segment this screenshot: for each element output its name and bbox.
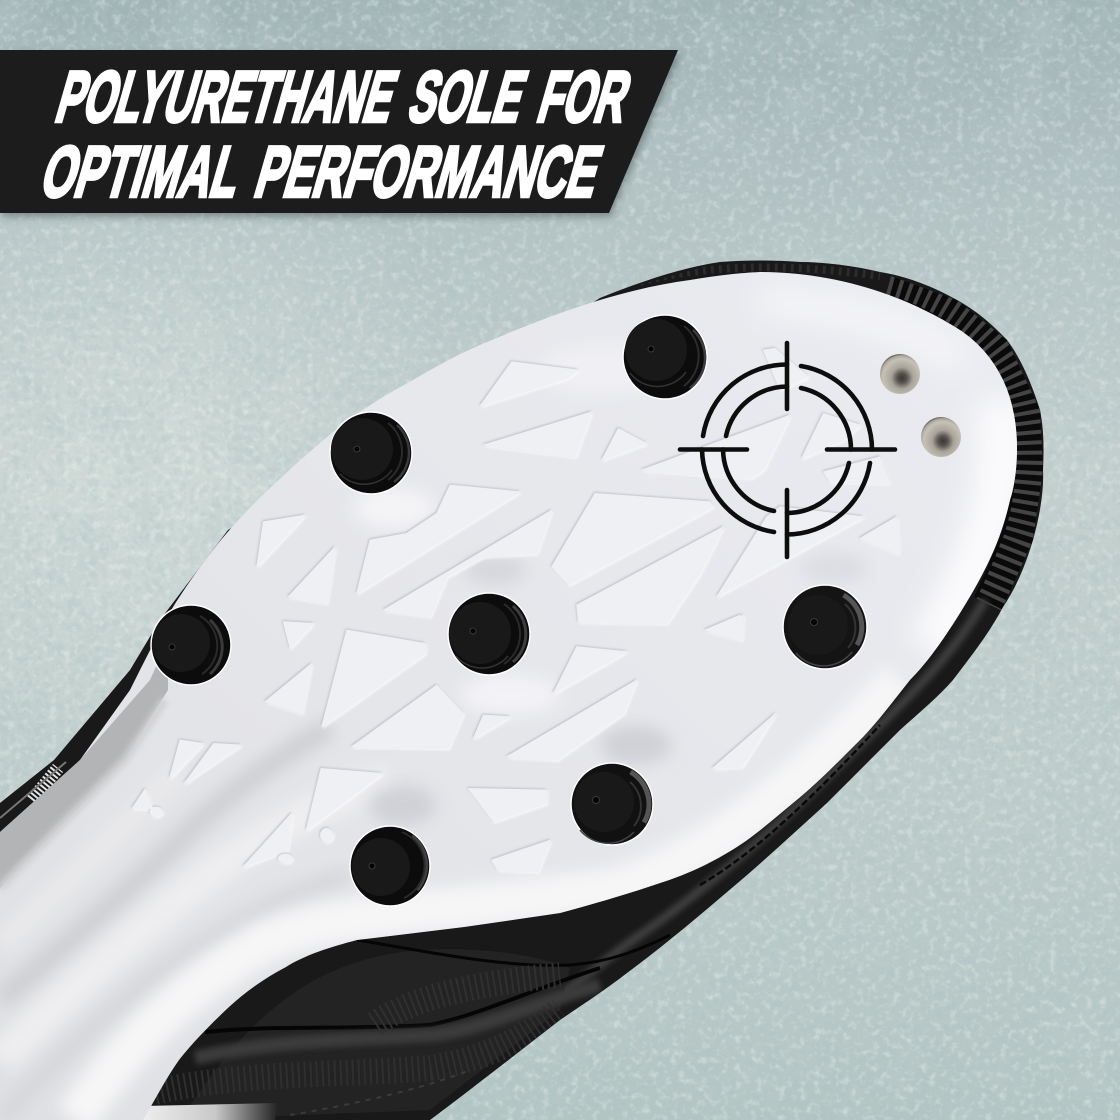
- banner: [0, 50, 678, 213]
- white polyurethane sole: [0, 272, 1017, 1120]
- side highlight: [540, 600, 985, 1010]
- stud 2: [330, 412, 412, 494]
- football boot: [0, 260, 1044, 1120]
- embossed tread pattern: [133, 348, 898, 872]
- stud 7: [350, 826, 430, 906]
- lace strip texture: [32, 768, 58, 800]
- white halftone patch: [138, 1103, 278, 1120]
- metal rivet 1: [880, 354, 920, 394]
- stud 4: [448, 593, 530, 675]
- dimples near studs: [600, 725, 672, 765]
- title line 1: POLYURETHANE SOLE FOR: [49, 56, 640, 137]
- heel rib texture: [890, 280, 1031, 605]
- stud 5: [783, 585, 867, 669]
- stud 3: [151, 605, 231, 685]
- icon: precision target: [680, 343, 895, 557]
- stud 6: [571, 763, 653, 845]
- sole shading valleys and ridges: [0, 728, 330, 1000]
- title line 2: OPTIMAL PERFORMANCE: [34, 131, 611, 212]
- left grey channel: [0, 666, 168, 888]
- stud 1: [623, 315, 707, 399]
- metal rivet 2: [921, 417, 961, 457]
- black boot upper: [0, 260, 1044, 1120]
- lower upper panels and stitching: [155, 935, 670, 1120]
